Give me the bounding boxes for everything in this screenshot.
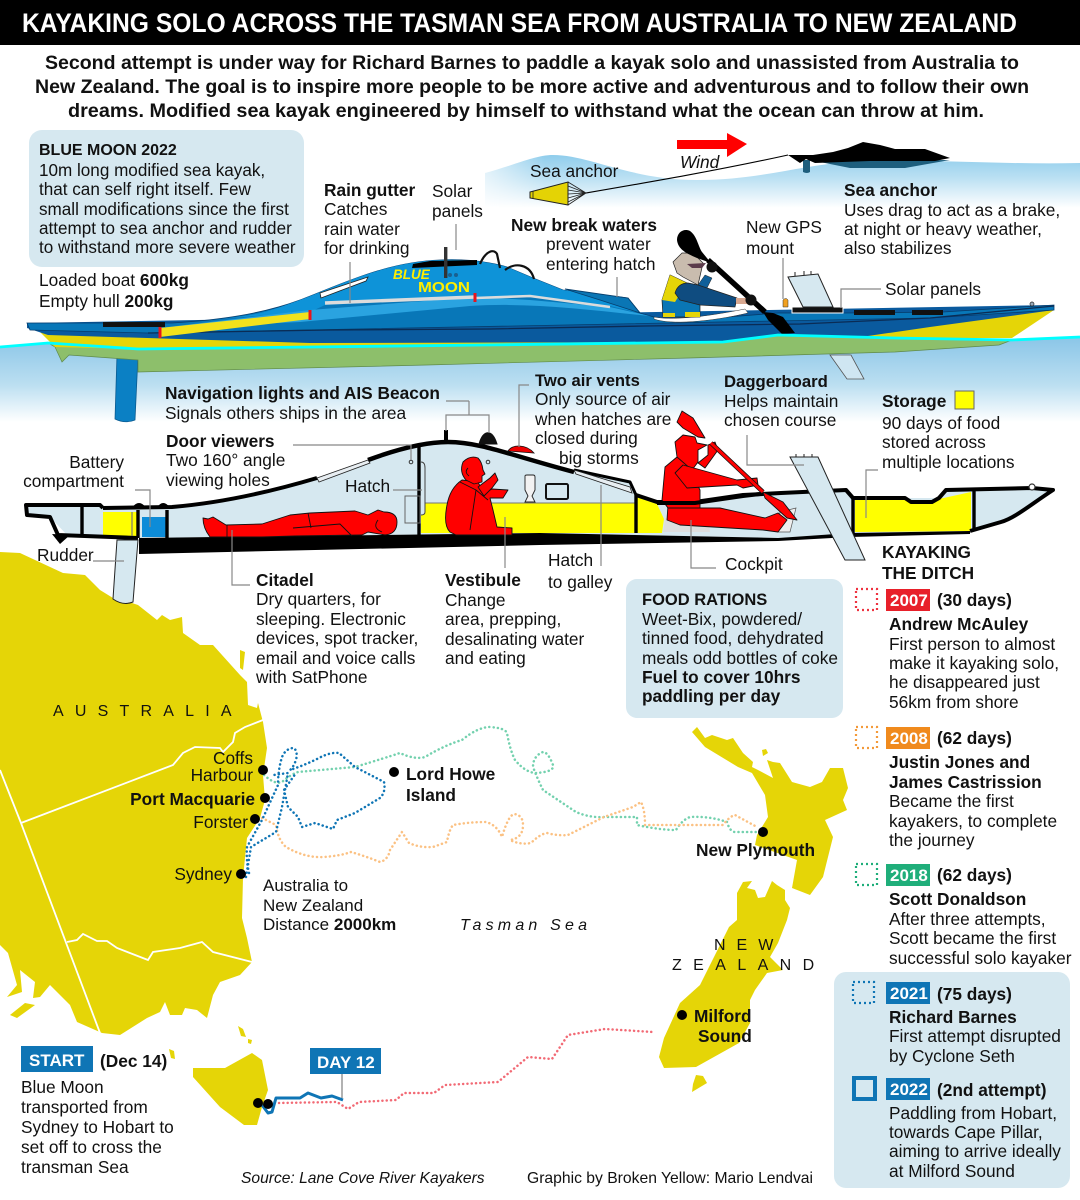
hand: [736, 298, 748, 304]
label: storage: multiple locations: [882, 452, 1015, 472]
map label: Coffs Harbour: Harbour: [191, 765, 253, 785]
vest and lower body: [662, 275, 700, 317]
day 12 callout: [310, 1048, 381, 1098]
map label: New Plymouth: New Plymouth: [696, 840, 815, 860]
boat name: BLUE: [393, 267, 431, 282]
food rations panel: FOOD RATIONS: [642, 591, 767, 609]
weights: Loaded boat 600kg: [39, 270, 189, 290]
legend: 2008: James Castrission: [889, 772, 1042, 792]
food rations panel: Weet-Bix, powdered/: [642, 609, 802, 629]
legend: 2008: kayakers, to complete: [889, 811, 1057, 831]
title banner: [0, 0, 1080, 45]
sea anchor scene: wave: [485, 155, 1080, 204]
forward hatch break waters: [565, 289, 640, 313]
weights: Empty hull 200kg: [39, 291, 174, 311]
hand rails: [480, 251, 534, 279]
label: two air vents: Two air vents: [535, 371, 640, 390]
figure: sitting person eating: [446, 457, 512, 535]
head: [673, 253, 703, 285]
legend: 2007: make it kayaking solo,: [889, 653, 1059, 673]
label: hatch: Hatch: [345, 476, 390, 496]
sea band under kayak: [0, 335, 1080, 424]
map labels: Australia: AUSTRALIA: [53, 703, 243, 720]
legend: 2018: successful solo kayaker: [889, 948, 1072, 968]
map label: Lord Howe Island: Lord Howe: [406, 764, 496, 784]
label: new GPS mount: [746, 217, 822, 299]
label: storage: [866, 391, 1015, 518]
label: two air vents: closed during: [535, 428, 638, 448]
hatch door: [421, 462, 425, 515]
blue moon panel: small modifications since the first: [39, 200, 289, 219]
label: hatch: [345, 476, 422, 496]
map label: Milford Sound: Milford: [694, 1006, 752, 1026]
section rudder: [113, 540, 138, 603]
hull lines: [103, 478, 317, 508]
label: solar panels top: Solar: [432, 181, 473, 201]
kayak exterior: [27, 247, 1054, 372]
label: new break waters: [511, 215, 657, 297]
yellow storage: bow: [855, 492, 971, 532]
dark lower blue strip: [27, 305, 1054, 343]
label: new break waters: New break waters: [511, 215, 657, 235]
legend: 2021: by Cyclone Seth: [889, 1046, 1015, 1066]
food rations panel: tinned food, dehydrated: [642, 628, 824, 648]
legend: 2008: 2008: [890, 729, 928, 748]
label: citadel: with SatPhone: [255, 667, 367, 687]
label: cockpit: [691, 520, 783, 574]
label: vestibule: desalinating water: [445, 629, 585, 649]
kayak cross-section: [26, 430, 1053, 554]
start callout: Blue Moon: [21, 1077, 104, 1097]
map label: Milford Sound: Sound: [698, 1026, 752, 1046]
label: storage: Storage: [882, 391, 947, 411]
food rations panel: meals odd bottles of coke: [642, 648, 838, 668]
label: rudder: [37, 545, 124, 565]
label: vestibule: Change: [445, 590, 506, 610]
label: vestibule: area, prepping,: [445, 609, 561, 629]
legend: 2008: [856, 727, 1057, 850]
label: door viewers: viewing holes: [166, 470, 270, 490]
legend: 2022: towards Cape Pillar,: [889, 1122, 1043, 1142]
forward arm: [675, 283, 737, 307]
label: battery compartment: Battery: [69, 452, 124, 472]
legend panel: Richard Barnes: [834, 972, 1070, 1188]
label: daggerboard: chosen course: [724, 410, 836, 430]
map label: New Zealand: ZEALAND: [672, 957, 826, 974]
legend: 2008: Justin Jones and: [889, 752, 1030, 772]
water tank: [525, 475, 535, 502]
cabin window: [412, 260, 477, 268]
stern skeg: [52, 534, 70, 544]
label: daggerboard: Helps maintain: [724, 391, 838, 411]
label: hatch to galley: [548, 485, 613, 592]
blue moon panel: [29, 130, 304, 267]
label: battery compartment: [23, 452, 150, 527]
bright deck shoulder: [230, 260, 640, 318]
label: rain gutter: rain water: [324, 219, 400, 239]
legend: 2008: Became the first: [889, 791, 1014, 811]
start callout: (Dec 14): [100, 1051, 167, 1071]
legend: 2018: Scott Donaldson: [889, 889, 1026, 909]
legend: 2021: 2021: [890, 984, 928, 1003]
label: solar panels side: [841, 279, 981, 307]
route 2008 orange: [262, 802, 757, 862]
start callout: START: [29, 1051, 85, 1070]
food rations panel: [626, 579, 843, 718]
label: new break waters: prevent water: [546, 234, 651, 254]
map label: Lord Howe Island: [406, 764, 496, 805]
label: citadel: email and voice calls: [256, 648, 416, 668]
upper deck: [27, 260, 1054, 333]
label: rain gutter: for drinking: [324, 238, 410, 258]
label: storage: 90 days of food: [882, 413, 1000, 433]
map label: New Zealand: NEW: [714, 937, 784, 954]
map label: New Zealand: [672, 937, 826, 974]
legend: 2022: [854, 1078, 1061, 1181]
legend heading: [882, 542, 974, 583]
legend: 2007: Andrew McAuley: [889, 614, 1029, 634]
start callout: transported from: [21, 1097, 148, 1117]
label: sea anchor device: Sea anchor: [530, 161, 619, 181]
yellow storage: under floor: [421, 497, 664, 533]
antenna: [444, 247, 447, 278]
food rations panel: paddling per day: [642, 686, 781, 706]
label: two air vents: when hatches are: [534, 409, 671, 429]
label: navigation lights: Signals others ships in the area: [165, 403, 407, 423]
blue moon panel: BLUE MOON 2022: [39, 142, 177, 159]
label: vestibule: [445, 517, 585, 668]
start callout: Sydney to Hobart to: [21, 1117, 174, 1137]
distance note: New Zealand: [263, 896, 363, 915]
cabin interior: [26, 442, 1053, 538]
underwater rudder: [115, 355, 138, 422]
label: sea anchor explained: Uses drag to act as a brake,: [844, 200, 1060, 220]
label: solar panels top: panels: [432, 201, 483, 221]
legend: 2018: 2018: [890, 866, 928, 885]
label: solar panels top: [432, 181, 483, 250]
cockpit seat: [663, 518, 710, 532]
route 2022 progress, blue: [262, 1093, 343, 1113]
label: citadel: [232, 530, 418, 687]
blue moon panel: that can self right itself. Few: [39, 180, 252, 199]
label: door viewers: [166, 431, 411, 490]
figure: paddler in red: [662, 411, 797, 532]
distance note: [263, 876, 396, 934]
blue moon panel: to withstand more severe weather: [39, 238, 296, 257]
yellow vest panel: [662, 275, 700, 317]
map: Australia: [0, 552, 267, 1035]
label: hatch to galley: to galley: [548, 572, 613, 592]
map label: Coffs Harbour: Coffs: [213, 748, 253, 768]
legend: 2022: aiming to arrive ideally: [889, 1141, 1061, 1161]
label: cockpit: Cockpit: [725, 554, 783, 574]
label: sea anchor explained: Sea anchor: [844, 180, 937, 200]
label: door viewers: Door viewers: [166, 431, 275, 451]
legend: 2007: (30 days): [937, 590, 1012, 610]
rear arm: [698, 275, 712, 292]
map: New Zealand South Island: [659, 881, 790, 1092]
icon: wind arrow: [677, 133, 747, 157]
section daggerboard: [790, 454, 865, 560]
label: sea anchor explained: [844, 180, 1060, 258]
paddle shaft: [708, 260, 765, 312]
legend: 2021: [853, 982, 1061, 1066]
label: two air vents: big storms: [559, 448, 639, 468]
blue moon panel: attempt to sea anchor and rudder: [39, 219, 292, 238]
gloves: [706, 262, 718, 272]
legend: 2007: First person to almost: [889, 634, 1055, 654]
legend: 2007: he disappeared just: [889, 672, 1040, 692]
food rations panel: Fuel to cover 10hrs: [642, 667, 800, 687]
footrest: [778, 508, 796, 532]
sheer line: [148, 306, 1054, 333]
intro text: Second attempt is under way for Richard Barnes to paddle a kayak solo and unassisted from Australia to: [45, 52, 1019, 74]
paddle blades: [677, 230, 795, 334]
map: Tasmania: [169, 1026, 268, 1125]
rear hatch: [317, 460, 370, 482]
label: hatch to galley: Hatch: [548, 550, 593, 570]
GPS mount: [783, 298, 788, 307]
paddler on deck: [662, 230, 795, 334]
label: navigation lights: Navigation lights and AIS Beacon: [165, 383, 440, 403]
label: rudder: Rudder: [37, 545, 94, 565]
intro text: dreams. Modified sea kayak engineered by himself to withstand what the ocean can throw at him.: [68, 100, 984, 122]
boat name: [393, 267, 470, 296]
label: storage: stored across: [882, 432, 986, 452]
route 2021 blue: [246, 748, 384, 877]
label: sea anchor explained: at night or heavy weather,: [844, 219, 1042, 239]
map label: Forster: Forster: [193, 812, 248, 832]
route 2018 green: [264, 727, 762, 832]
blue moon panel: 10m long modified sea kayak,: [39, 161, 265, 180]
antenna: [444, 430, 448, 442]
solar cells: [792, 307, 943, 315]
legend: 2022: Paddling from Hobart,: [889, 1103, 1057, 1123]
legend: 2018: Scott became the first: [889, 928, 1056, 948]
bow eyelet: [1030, 302, 1034, 306]
label: battery compartment: compartment: [23, 471, 124, 491]
legend heading: THE DITCH: [882, 563, 974, 583]
label: new break waters: entering hatch: [546, 254, 656, 274]
hull below waterline: [48, 335, 1012, 372]
label: sea anchor explained: also stabilizes: [844, 238, 952, 258]
shelf line: [421, 502, 636, 504]
legend: 2007: 56km from shore: [889, 692, 1019, 712]
legend: 2007: [856, 589, 1059, 712]
map label: Tasman Sea: Tasman Sea: [460, 917, 591, 934]
weights: [39, 270, 189, 311]
legend: 2022: (2nd attempt): [937, 1080, 1046, 1100]
figure: sleeping person: [203, 510, 397, 537]
legend: 2007: 2007: [890, 591, 928, 610]
legend: 2022: at Milford Sound: [889, 1161, 1015, 1181]
map label: Coffs Harbour: [191, 748, 253, 785]
cockpit rim: [654, 309, 748, 322]
label: door viewers: Two 160° angle: [166, 450, 285, 470]
start callout: [21, 1046, 174, 1177]
white rub strips: [325, 297, 475, 303]
air vents: [448, 273, 458, 277]
keel: [139, 531, 970, 554]
deck fittings: [133, 504, 169, 508]
label: rain gutter: Rain gutter: [324, 180, 415, 200]
day 12 callout: DAY 12: [317, 1053, 375, 1072]
label: vestibule: Vestibule: [445, 570, 521, 590]
label: solar panels side: Solar panels: [885, 279, 981, 299]
label: new GPS mount: mount: [746, 238, 794, 258]
source credit: Source: Lane Cove River Kayakers: [241, 1170, 485, 1187]
battery: [142, 517, 166, 537]
intro text: New Zealand. The goal is to inspire more people to be more active and adventurous and to follow their own: [35, 76, 1029, 98]
yellow stern stripe: [160, 312, 310, 337]
label: rain gutter: [324, 180, 415, 303]
boat name: MOON: [418, 280, 470, 296]
cabin vent bump: [479, 433, 497, 444]
map: New Zealand North Island: [692, 727, 848, 895]
sea anchor device: [530, 155, 788, 205]
legend: 2008: the journey: [889, 830, 975, 850]
distance note: Australia to: [263, 876, 348, 895]
door viewers: [409, 460, 490, 464]
legend: 2021: (75 days): [937, 984, 1012, 1004]
yellow boot stripe and bow: [40, 310, 1054, 349]
distance note: Distance 2000km: [263, 915, 396, 934]
label: citadel: Citadel: [256, 570, 314, 590]
legend: 2018: After three attempts,: [889, 909, 1046, 929]
label: citadel: Dry quarters, for: [256, 589, 381, 609]
label: two air vents: [519, 371, 671, 468]
tablet: [546, 484, 568, 499]
cap peak: [687, 263, 706, 268]
underwater daggerboard: [830, 355, 864, 379]
legend: 2022: 2022: [890, 1080, 928, 1099]
label: two air vents: Only source of air: [535, 389, 671, 409]
bulkheads: [82, 447, 974, 538]
route 2007 and 2022 planned, red: [279, 1029, 653, 1109]
map label: Milford Sound: [694, 1006, 752, 1046]
legend: 2018: [856, 864, 1072, 968]
map label: Port Macquarie: Port Macquarie: [130, 789, 255, 809]
label: daggerboard: Daggerboard: [724, 372, 828, 391]
rear deck handle: [320, 277, 368, 298]
label: citadel: sleeping. Electronic: [256, 609, 406, 629]
red markers: [160, 293, 475, 338]
anchored kayak silhouette: [788, 142, 950, 173]
waterline: [0, 335, 1080, 349]
stern deck fittings: [103, 322, 165, 327]
map label: Lord Howe Island: Island: [406, 785, 456, 805]
yellow storage: stern: [103, 512, 138, 536]
intro text: [35, 52, 1029, 122]
title banner: KAYAKING SOLO ACROSS THE TASMAN SEA FROM AUSTRALIA TO NEW ZEALAND: [22, 8, 1017, 38]
legend: 2008: (62 days): [937, 728, 1012, 748]
label: new GPS mount: New GPS: [746, 217, 822, 237]
cockpit coaming over paddler: [657, 494, 760, 503]
legend: 2021: First attempt disrupted: [889, 1026, 1061, 1046]
wind label: Wind: [680, 152, 721, 172]
lighter chine band: [160, 297, 650, 328]
label: citadel: devices, spot tracker,: [256, 628, 418, 648]
graphic credit: Graphic by Broken Yellow: Mario Lendvai: [527, 1170, 813, 1187]
galley hatch: [574, 470, 632, 493]
legend heading: KAYAKING: [882, 542, 971, 562]
map dots: places: [236, 765, 768, 1109]
legend: 2021: Richard Barnes: [889, 1007, 1017, 1027]
label: daggerboard: [724, 372, 838, 465]
start callout: set off to cross the: [21, 1137, 162, 1157]
start callout: transman Sea: [21, 1157, 129, 1177]
label: vestibule: and eating: [445, 648, 526, 668]
legend: 2018: (62 days): [937, 865, 1012, 885]
door panel: [405, 496, 420, 523]
label: rain gutter: Catches: [324, 199, 388, 219]
label: navigation lights: [165, 383, 489, 433]
red vent: [508, 446, 534, 453]
map label: Sydney: Sydney: [174, 864, 232, 884]
tilted solar panel: [788, 271, 833, 307]
